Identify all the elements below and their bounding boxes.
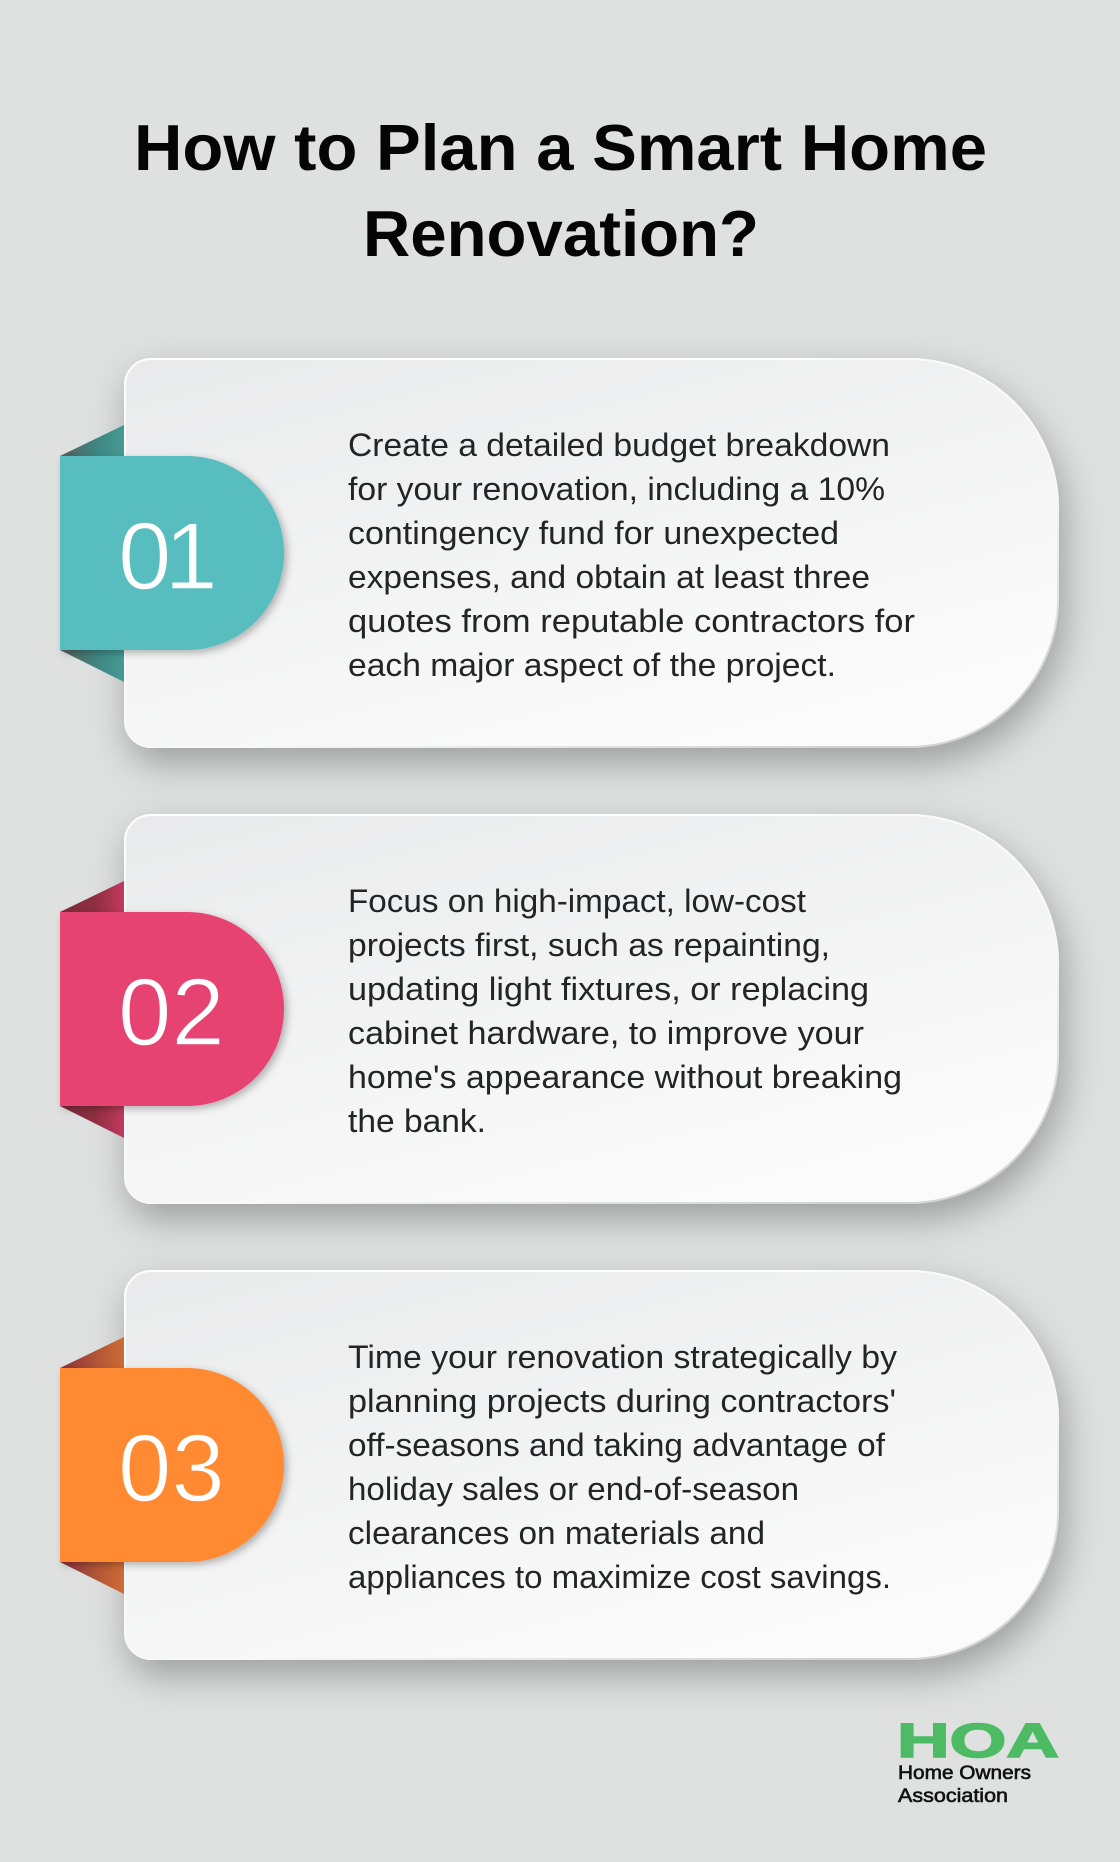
panel: step 02 <box>60 815 1058 1203</box>
title <box>134 111 987 270</box>
ribbon fold top 02 <box>60 881 124 912</box>
logo: HOA Home Owners Association <box>897 1715 1059 1807</box>
text block 03: planning projects during contractors' <box>348 1383 896 1419</box>
logo: HOA Home Owners Association: Home Owners <box>898 1762 1031 1784</box>
number badge 02 <box>60 912 284 1106</box>
text block 03 <box>348 1339 898 1595</box>
text block 02: projects first, such as repainting, <box>348 927 830 963</box>
card 03 background <box>125 1271 1058 1659</box>
panel: step 03 <box>60 1271 1058 1659</box>
text block 02: Focus on high-impact, low-cost <box>348 883 806 919</box>
ribbon fold bottom 02 <box>60 1106 124 1138</box>
text block 02: cabinet hardware, to improve your <box>348 1015 864 1051</box>
text block 01: for your renovation, including a 10% <box>348 471 885 507</box>
number badge 01: 01 <box>118 503 218 610</box>
text block 03: clearances on materials and <box>348 1515 765 1551</box>
number badge 01 <box>60 456 284 650</box>
text block 01: each major aspect of the project. <box>348 647 836 683</box>
text block 02 <box>348 883 902 1139</box>
text block 02: updating light fixtures, or replacing <box>348 971 869 1007</box>
panel: step 01 <box>60 359 1058 747</box>
card 01 background <box>125 359 1058 747</box>
text block 03: holiday sales or end-of-season <box>348 1471 799 1507</box>
text block 02: home's appearance without breaking <box>348 1059 902 1095</box>
number badge 02: 02 <box>118 959 225 1066</box>
title: Renovation? <box>363 197 759 270</box>
logo: HOA Home Owners Association: Association <box>898 1785 1008 1807</box>
text block 01: contingency fund for unexpected <box>348 515 839 551</box>
text block 01 <box>348 427 915 683</box>
text block 01: Create a detailed budget breakdown <box>348 427 890 463</box>
text block 03: off-seasons and taking advantage of <box>348 1427 886 1463</box>
text block 03: Time your renovation strategically by <box>348 1339 898 1375</box>
card 02 background <box>125 815 1058 1203</box>
ribbon fold top 01 <box>60 425 124 456</box>
text block 01: quotes from reputable contractors for <box>348 603 915 639</box>
ribbon fold bottom 03 <box>60 1562 124 1594</box>
text block 02: the bank. <box>348 1103 486 1139</box>
number badge 03: 03 <box>118 1415 225 1522</box>
logo: HOA Home Owners Association: HOA <box>897 1715 1059 1768</box>
text block 01: expenses, and obtain at least three <box>348 559 870 595</box>
title: How to Plan a Smart Home <box>134 111 987 184</box>
text block 03: appliances to maximize cost savings. <box>348 1559 891 1595</box>
ribbon fold bottom 01 <box>60 650 124 682</box>
number badge 03 <box>60 1368 284 1562</box>
ribbon fold top 03 <box>60 1337 124 1368</box>
